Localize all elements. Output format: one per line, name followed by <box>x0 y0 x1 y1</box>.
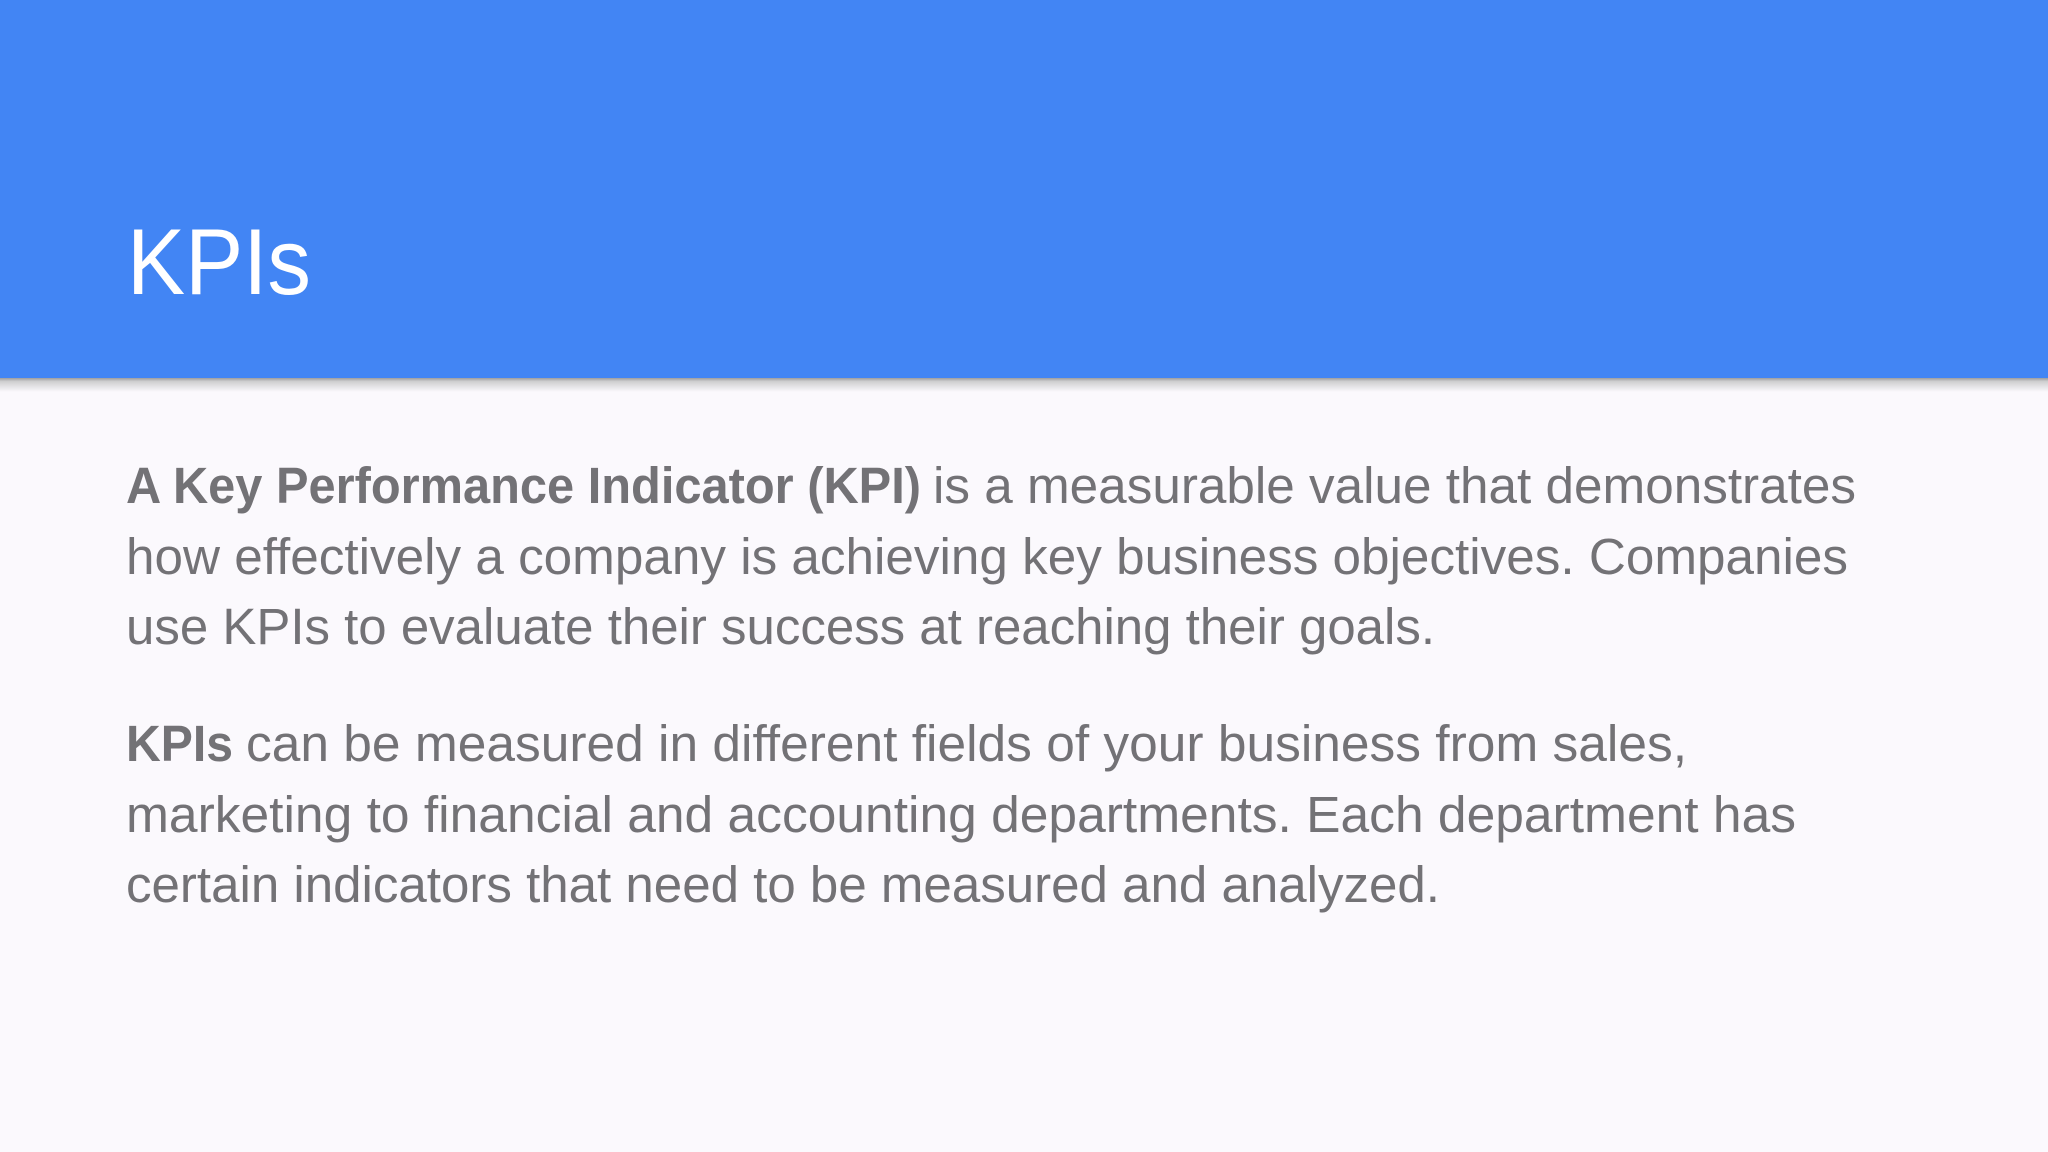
text block: KPI definition: is a measurable value that demonstrates <box>933 457 1856 514</box>
text block: KPI definition: how effectively a company is achieving key business objectives. Companies <box>126 528 1848 585</box>
text block: KPI definition <box>126 457 1856 655</box>
text block: KPI definition: A Key Performance Indicator (KPI) <box>126 457 921 514</box>
text block: KPI definition: use KPIs to evaluate their success at reaching their goals. <box>126 598 1435 655</box>
text block: KPI fields <box>126 715 1796 913</box>
text block: KPI fields: certain indicators that need to be measured and analyzed. <box>126 856 1440 913</box>
text block: KPI fields: marketing to financial and accounting departments. Each department has <box>126 786 1796 843</box>
header band <box>0 0 2048 378</box>
text block: KPI fields: KPIs <box>126 715 233 772</box>
text block: KPI fields: can be measured in different fields of your business from sales, <box>246 715 1687 772</box>
title: KPIs <box>127 209 311 314</box>
